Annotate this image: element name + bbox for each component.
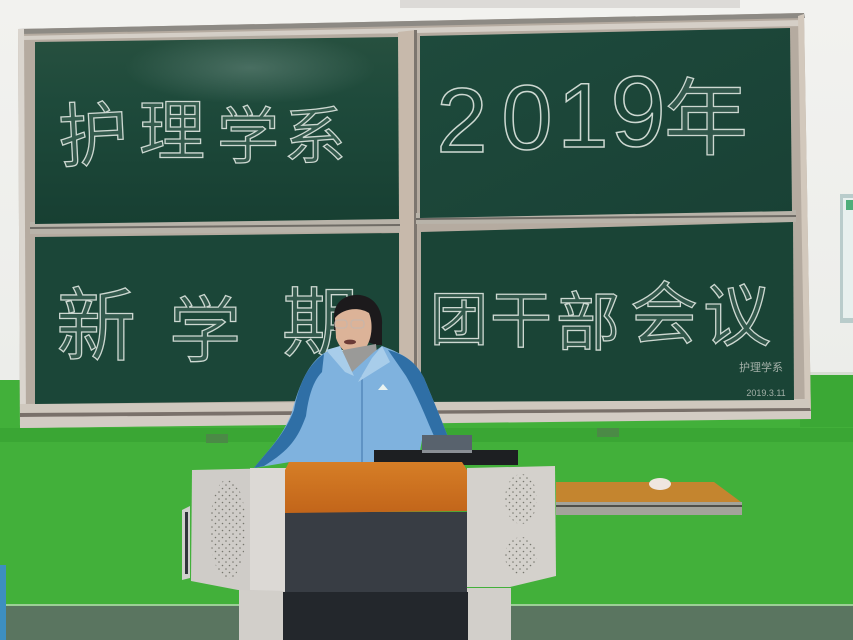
chalk heading line 2: 干 xyxy=(490,287,552,356)
green lower wall xyxy=(0,380,853,606)
right wing xyxy=(467,466,556,587)
board panel: bottom right xyxy=(421,222,794,402)
chalk heading line 2: 新 xyxy=(56,282,136,371)
left wing xyxy=(191,468,286,591)
laptop and devices xyxy=(374,435,518,465)
chalk heading line 1: 理 xyxy=(139,94,205,168)
chalk heading line 2: 部 xyxy=(556,287,620,359)
neck and scarf xyxy=(340,344,378,376)
chalkboard frame xyxy=(18,13,811,428)
floor xyxy=(0,606,853,640)
chalk signature xyxy=(739,360,786,398)
chalk year 2019年: 2 xyxy=(436,70,488,172)
chalk year 2019年: 年 xyxy=(664,72,748,166)
dark shoulder panels xyxy=(254,354,324,468)
white wall xyxy=(0,0,853,380)
chalk signature: 护理学系 xyxy=(739,360,783,374)
board panel: bottom left xyxy=(35,233,399,404)
poster on right wall xyxy=(840,194,853,323)
chalk heading line 2 xyxy=(56,277,771,372)
side table xyxy=(556,478,742,515)
chalk heading line 2: 团 xyxy=(430,288,488,353)
left speaker grille xyxy=(210,479,246,579)
orange wood top xyxy=(285,462,467,513)
chalk signature: 2019.3.11 xyxy=(746,388,786,398)
collar xyxy=(326,346,390,382)
chalk year 2019年: 0 xyxy=(501,67,553,169)
chalk heading line 1 xyxy=(56,94,346,177)
wall brackets xyxy=(206,434,228,443)
zip xyxy=(361,376,363,462)
chalk heading line 1: 护 xyxy=(56,95,130,177)
chalk heading line 2: 学 xyxy=(169,292,241,372)
chalk year 2019年: 9 xyxy=(610,56,666,168)
mouth xyxy=(344,340,356,344)
jacket xyxy=(254,346,450,468)
chalk heading line 1: 学 xyxy=(217,103,279,172)
right speaker grilles xyxy=(505,474,537,524)
front dark panel xyxy=(285,512,467,592)
chalk heading line 2: 议 xyxy=(703,279,771,355)
speaker xyxy=(254,295,450,468)
chalk year 2019年: 1 xyxy=(557,65,609,167)
chalk heading line 1: 系 xyxy=(284,103,346,172)
base column xyxy=(239,588,511,640)
lectern xyxy=(182,462,556,640)
chalk heading line 2: 期 xyxy=(282,282,358,367)
hair xyxy=(334,295,382,345)
glasses xyxy=(335,320,364,328)
chalk year 2019年 xyxy=(436,56,748,172)
face xyxy=(335,309,372,355)
board panel: top right xyxy=(420,28,792,218)
chalk heading line 2: 会 xyxy=(630,277,698,353)
board panel: top left xyxy=(35,37,399,224)
logo xyxy=(378,384,388,390)
